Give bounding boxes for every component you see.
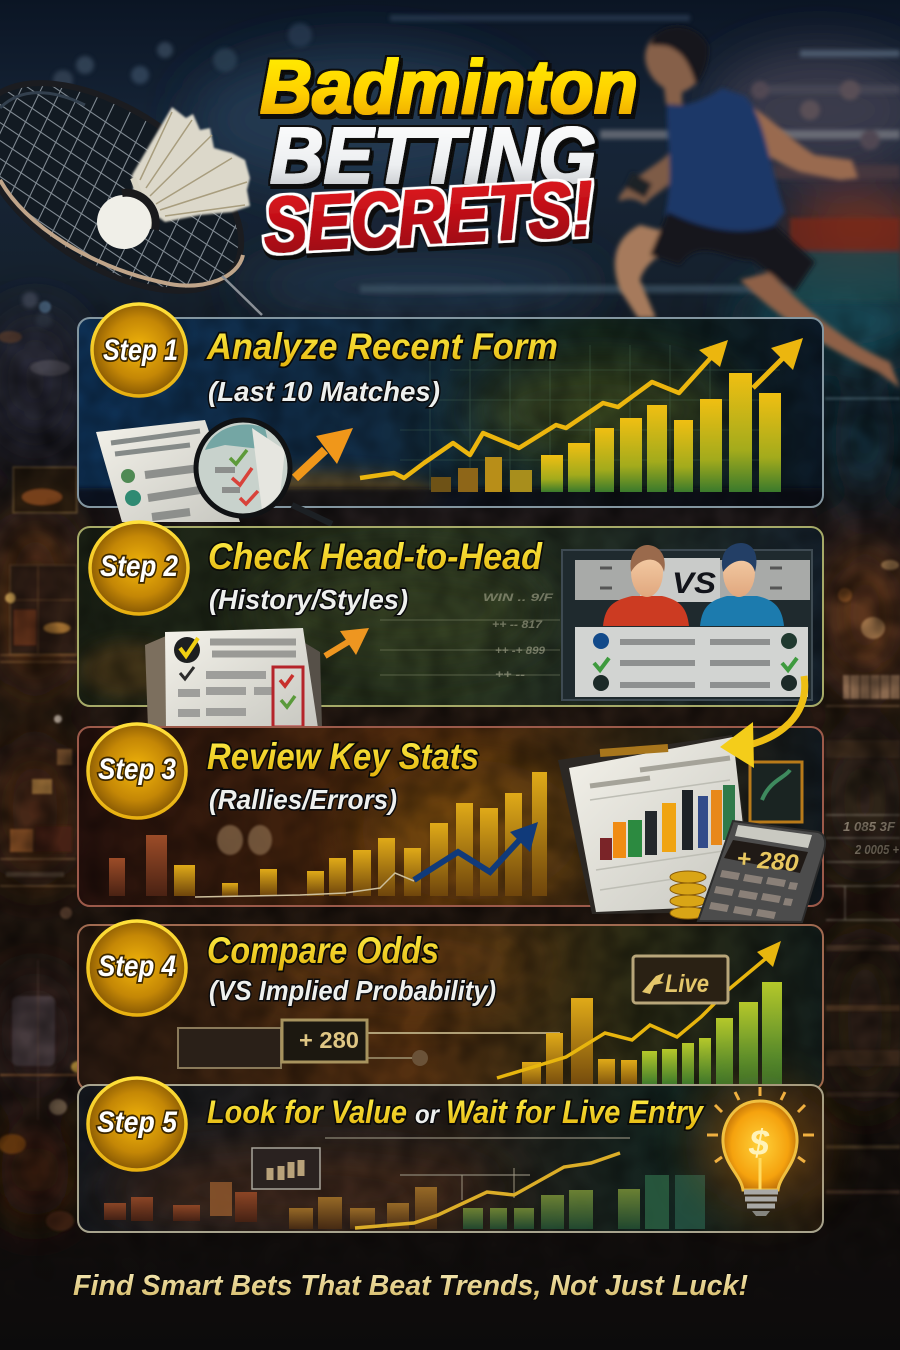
step 3 badge: Step 3: [98, 753, 176, 786]
subheading: (VS Implied Probability): [209, 975, 496, 1006]
icon: magnifier: [196, 420, 332, 524]
title: [260, 45, 638, 269]
icon: clipboard: [145, 628, 322, 728]
tablet with bar chart: [558, 735, 752, 914]
background numbers: ++ -- 817: [492, 619, 543, 631]
icon: lightbulb: $: [748, 1122, 770, 1163]
icon: calculator: + 280: [735, 845, 800, 877]
background numbers: WIN .. 9/F: [483, 592, 553, 604]
background: right margin data labels: 1 085 3F: [843, 819, 896, 834]
icon: lightbulb: [700, 1087, 820, 1216]
racket and shuttlecock: [0, 80, 263, 316]
background: right margin screens: [825, 397, 900, 1194]
trend line arrow: [360, 338, 803, 478]
bar chart: odds: [522, 982, 782, 1090]
heading: or: [415, 1099, 441, 1129]
step 2 badge: Step 2: [100, 550, 178, 583]
step 3 badge: [88, 724, 186, 818]
shuttlecock: [97, 107, 250, 249]
step 1 badge: [92, 304, 186, 396]
heading: Wait for Live Entry: [446, 1094, 705, 1130]
step 5 badge: Step 5: [97, 1106, 178, 1139]
trend line arrow: [195, 822, 538, 897]
bar chart: recent form: [431, 373, 781, 492]
panel: step 4 compare odds: [78, 920, 823, 1090]
player photo: [615, 26, 900, 388]
comparison table: [575, 627, 808, 697]
scoreboard strip: VS: [672, 567, 716, 600]
heading: Compare Odds: [207, 930, 439, 971]
background numbers: ++ -+ 899: [495, 645, 546, 657]
player: head: [645, 28, 706, 105]
background numbers: [483, 592, 553, 681]
icon: small orange arrow: [325, 628, 369, 656]
bar chart: value: [104, 1175, 705, 1229]
trend line arrow: [497, 941, 781, 1078]
chart thumbnail: [252, 1148, 320, 1189]
avatar: blue player: [700, 543, 784, 626]
title line: Badminton: Badminton: [260, 45, 638, 130]
vs comparison panel: [562, 543, 812, 700]
trend line: [355, 1153, 620, 1228]
icon: coins: [670, 871, 706, 919]
icon: small orange arrow: [295, 428, 353, 478]
step 1 badge: Step 1: [103, 334, 178, 367]
live badge: [633, 956, 728, 1003]
step 4 badge: [88, 921, 186, 1015]
heading: Look for Value: [207, 1094, 407, 1130]
step 2 badge: [90, 522, 188, 614]
odds chip +280: [282, 1020, 367, 1062]
subheading: (Rallies/Errors): [209, 784, 397, 815]
player: wristband: [625, 172, 652, 198]
background numbers: ++ --: [495, 669, 525, 681]
player: tank top: [665, 88, 785, 234]
heading: Check Head-to-Head: [208, 536, 543, 577]
heading: [207, 1094, 705, 1130]
background: left margin screens: [0, 301, 85, 1231]
panel: step 2 check head-to-head: [78, 522, 823, 728]
icon: small photo card: [750, 762, 802, 822]
footer tagline: Find Smart Bets That Beat Trends, Not Just Luck!: [73, 1270, 748, 1302]
live badge: Live: [665, 970, 709, 998]
bar chart: key stats: [109, 772, 547, 896]
background: right margin data labels: [843, 819, 899, 857]
player: arm: [725, 100, 858, 180]
avatar: red player: [603, 545, 689, 626]
subheading: (History/Styles): [209, 584, 408, 615]
panel: step 1 analyze recent form: [60, 304, 840, 524]
racket: [0, 80, 263, 316]
heading: Review Key Stats: [207, 736, 479, 777]
subheading: (Last 10 Matches): [208, 376, 440, 407]
icon: calculator: [698, 821, 825, 922]
odds frame: [178, 1028, 560, 1068]
panel: step 3 review key stats: [78, 724, 825, 922]
player: back leg: [615, 225, 900, 388]
icon: document with checks: [96, 420, 240, 522]
panel: step 5 look for value: [78, 1078, 823, 1232]
arrow: curved yellow connector: [720, 676, 805, 768]
title line: SECRETS!: SECRETS!: [261, 164, 595, 269]
step 4 badge: Step 4: [98, 950, 176, 983]
player: shorts: [650, 212, 815, 292]
step 5 badge: [88, 1078, 186, 1170]
heading: Analyze Recent Form: [206, 326, 558, 367]
title line: BETTING: BETTING: [270, 111, 596, 200]
odds chip +280: + 280: [299, 1027, 359, 1053]
scoreboard strip: [575, 558, 810, 602]
